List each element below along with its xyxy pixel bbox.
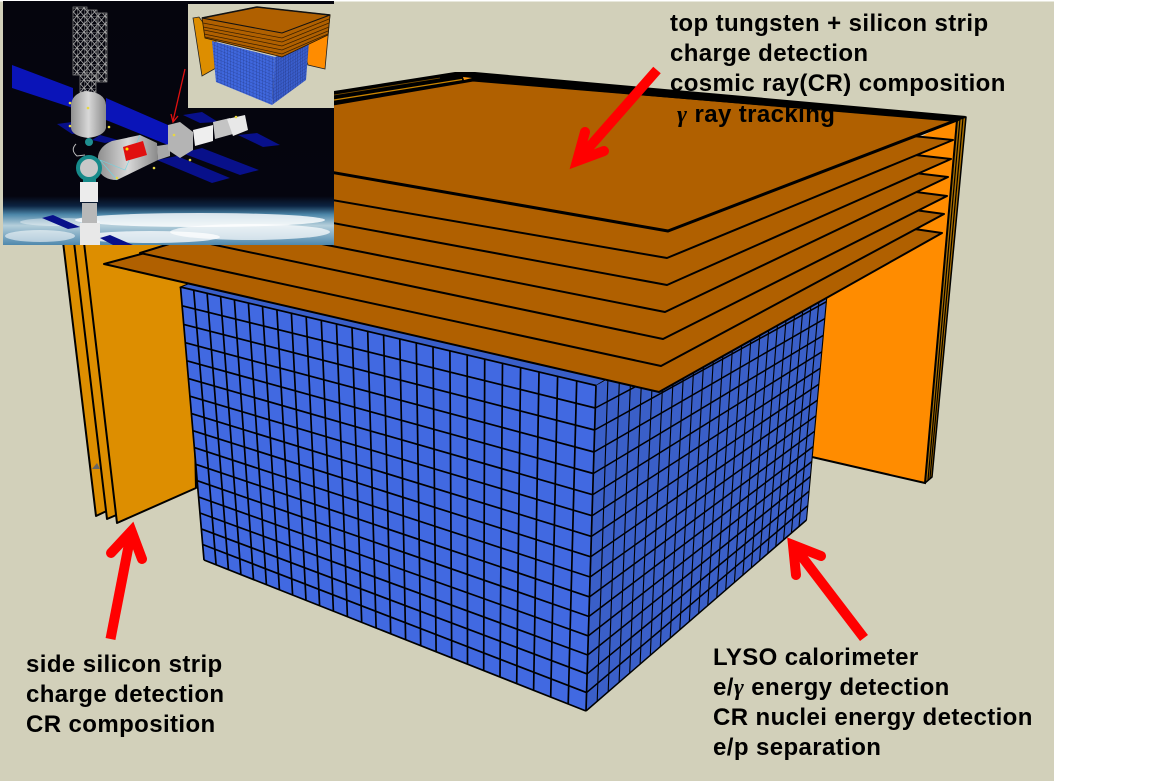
text: side silicon strip: side silicon strip <box>26 651 223 678</box>
text: side silicon strip: CR composition <box>26 711 216 738</box>
text: LYSO calorimeter: LYSO calorimeter <box>713 644 919 671</box>
text: top tungsten and silicon strip: cosmic ray(CR) composition <box>670 70 1006 97</box>
rear edge of top layer stack <box>334 72 966 122</box>
text: top tungsten and silicon strip: charge detection <box>670 40 868 67</box>
arrow: to top layers <box>577 70 657 161</box>
LYSO calorimeter crystal block <box>180 267 830 711</box>
photo: space station above Earth <box>3 1 334 245</box>
panel: right side silicon strip <box>800 117 966 483</box>
text: LYSO calorimeter <box>713 644 1033 761</box>
solar arrays <box>12 65 280 245</box>
station modules <box>69 91 248 245</box>
text: side silicon strip <box>26 651 224 738</box>
text: LYSO calorimeter: CR nuclei energy detection <box>713 704 1033 731</box>
panel: tungsten and silicon strip layer stack <box>104 80 957 392</box>
text: top tungsten and silicon strip: γ ray tracking <box>677 101 835 128</box>
text: top tungsten and silicon strip <box>670 10 1006 128</box>
panel: left side silicon strip stack <box>58 200 196 523</box>
small red arrow <box>171 69 185 122</box>
text: LYSO calorimeter: e/p separation <box>713 734 881 761</box>
lattice tower <box>73 7 107 93</box>
text: LYSO calorimeter: e/γ energy detection <box>713 674 950 701</box>
text: top tungsten and silicon strip: top tungsten + silicon strip <box>670 10 989 37</box>
inset: detector overview <box>188 4 334 108</box>
text: side silicon strip: charge detection <box>26 681 224 708</box>
Earth clouds <box>5 213 330 243</box>
arrow: to LYSO calorimeter <box>793 545 864 638</box>
arrow: to side silicon strip <box>110 531 142 639</box>
